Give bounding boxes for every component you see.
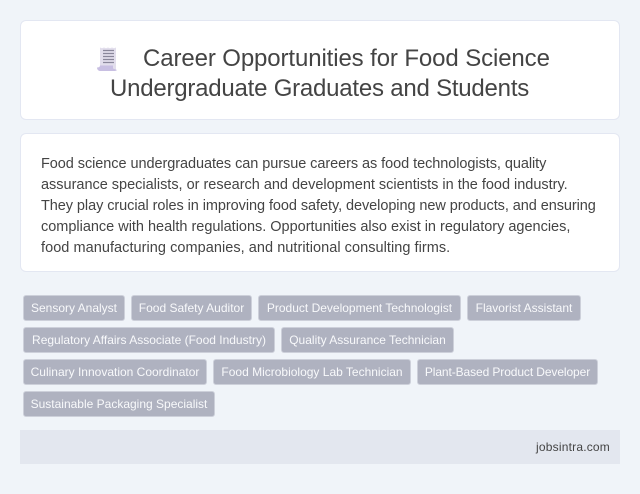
chip — [23, 391, 215, 417]
chip — [23, 359, 207, 385]
chip: Regulatory Affairs Associate (Food Industry) — [32, 333, 266, 347]
chip: Plant-Based Product Developer — [425, 365, 590, 379]
chip — [23, 295, 125, 321]
chip — [213, 359, 411, 385]
icon: document scroll — [97, 48, 117, 71]
title line 1: Career Opportunities for Food Science — [143, 45, 550, 72]
chip — [131, 295, 252, 321]
description text: compliance with health regulations. Opportunities also exist in regulatory agencies, — [41, 219, 570, 235]
chip — [23, 327, 275, 353]
chip: Sensory Analyst — [31, 301, 117, 315]
chip — [417, 359, 598, 385]
panel: description — [20, 133, 620, 272]
description text: food manufacturing companies, and nutritional consulting firms. — [41, 240, 450, 256]
chip: Flavorist Assistant — [476, 301, 572, 315]
description text: Food science undergraduates can pursue careers as food technologists, quality — [41, 156, 546, 172]
footer source label: jobsintra.com — [536, 440, 610, 454]
title line 2: Undergraduate Graduates and Students — [110, 75, 529, 102]
chip — [258, 295, 461, 321]
chip: Sustainable Packaging Specialist — [31, 397, 207, 411]
chip: Product Development Technologist — [267, 301, 452, 315]
description text: assurance specialists, or research and development scientists in the food industry. — [41, 177, 568, 193]
description text: They play crucial roles in improving food safety, developing new products, and ensuring — [41, 198, 596, 214]
chip: Culinary Innovation Coordinator — [31, 365, 199, 379]
chip — [467, 295, 581, 321]
chip: Quality Assurance Technician — [289, 333, 446, 347]
footer bar — [20, 430, 620, 464]
chip: Food Microbiology Lab Technician — [221, 365, 403, 379]
chip — [281, 327, 454, 353]
panel: title card — [20, 20, 620, 120]
chip: Food Safety Auditor — [139, 301, 244, 315]
description text — [41, 156, 596, 256]
